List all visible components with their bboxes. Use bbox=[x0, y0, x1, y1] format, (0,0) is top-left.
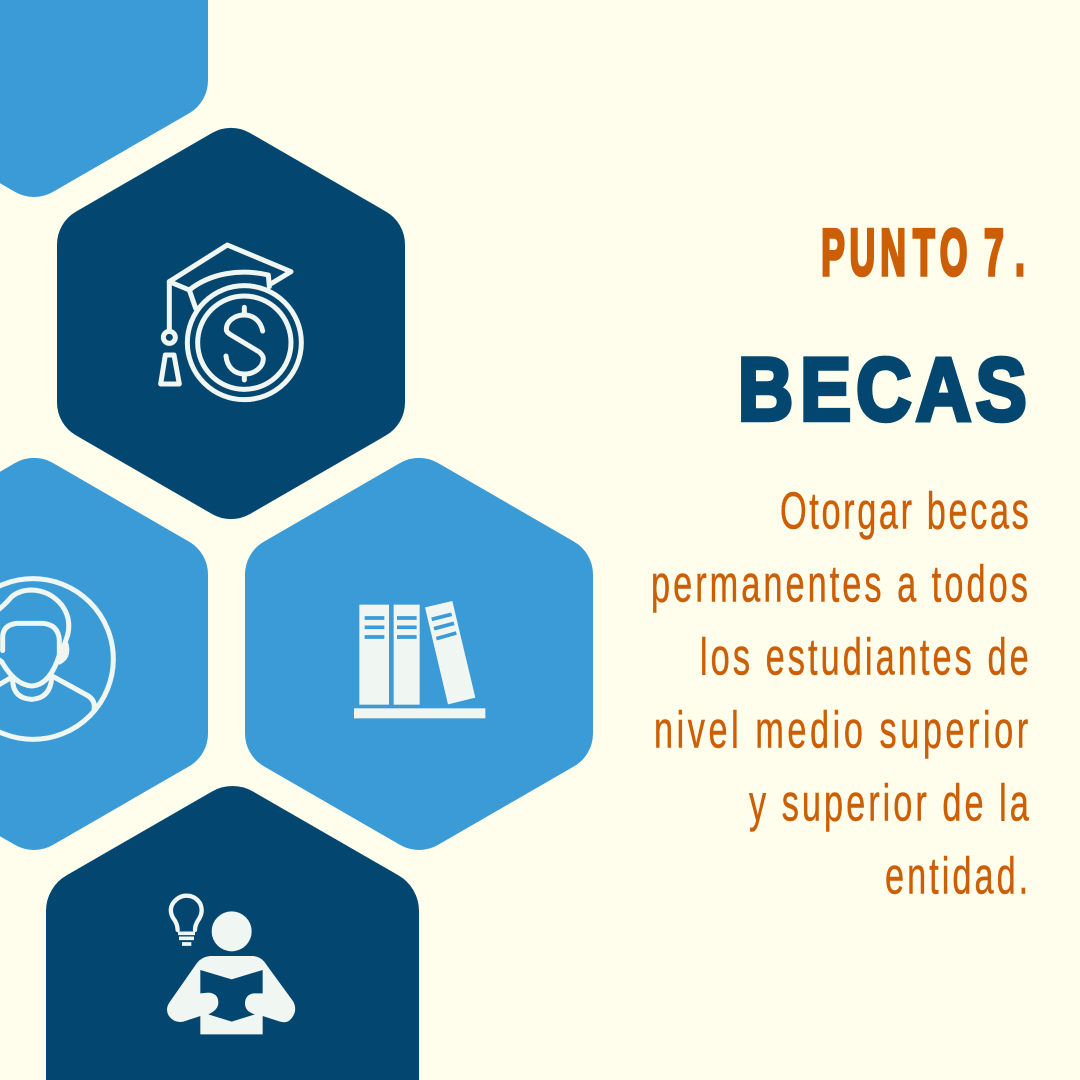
icon: person reading with light bulb bbox=[167, 896, 295, 1034]
hexagon: light blue books bbox=[245, 458, 593, 850]
text block: description: los estudiantes de bbox=[700, 628, 1029, 686]
panel: student profile hexagon bbox=[0, 458, 208, 850]
text block: description: nivel medio superior bbox=[654, 701, 1028, 759]
hexagon: dark blue scholarship bbox=[57, 128, 405, 519]
text block: description: permanentes a todos bbox=[651, 555, 1028, 613]
hexagon: dark blue reader bbox=[46, 786, 419, 1080]
panel: books hexagon bbox=[245, 458, 593, 850]
text block: description: y superior de la bbox=[749, 774, 1029, 832]
icon: student portrait in circle bbox=[0, 576, 116, 742]
text block: description: entidad. bbox=[885, 847, 1028, 905]
heading: becas: BECAS bbox=[738, 340, 1027, 439]
heading: punto 7: PUNTO 7. bbox=[821, 217, 1025, 290]
panel: graduation cap hexagon bbox=[57, 128, 405, 519]
text block: description: Otorgar becas bbox=[780, 482, 1029, 540]
icon: books on a shelf bbox=[354, 601, 485, 718]
icon: graduation cap with dollar coin bbox=[161, 245, 301, 400]
panel: reader hexagon bbox=[46, 786, 419, 1080]
hexagon: top light blue bbox=[0, 0, 208, 197]
hexagon: light blue student bbox=[0, 458, 208, 850]
text block: description bbox=[651, 482, 1029, 905]
